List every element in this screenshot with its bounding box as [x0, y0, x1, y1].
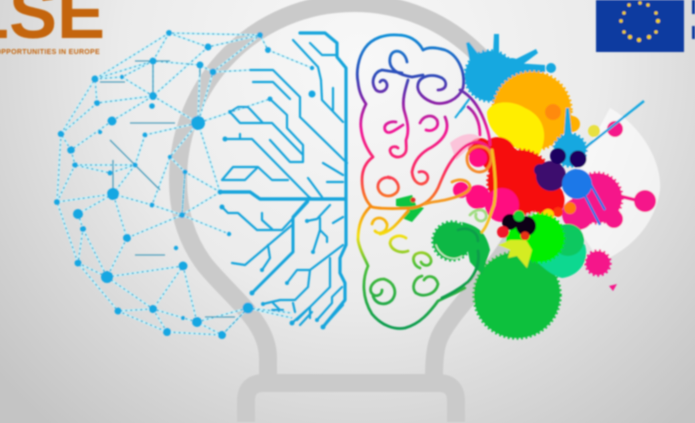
green leaf	[396, 195, 424, 222]
paint splashes	[396, 34, 656, 338]
yellow green splat	[498, 240, 532, 268]
teal splash	[537, 243, 588, 279]
mesh nodes	[54, 30, 316, 339]
cyan splash	[455, 34, 556, 118]
green blob left	[433, 222, 471, 260]
yellow splash	[487, 102, 544, 158]
yellow dot	[588, 125, 600, 137]
upper swirls	[390, 51, 423, 77]
lower circuit traces	[222, 202, 308, 270]
upper circuit traces	[230, 40, 347, 163]
colourful right brain swirls	[357, 35, 495, 328]
yellow spiral	[372, 211, 408, 234]
EU flag	[596, 0, 684, 52]
orange loops	[467, 146, 491, 172]
blue splash	[562, 169, 605, 225]
mesh links	[57, 33, 312, 335]
green spirals	[390, 236, 408, 252]
orange splash	[493, 72, 571, 150]
light bulb outline	[178, 3, 530, 422]
pink splash left	[450, 134, 519, 222]
white splash halo	[560, 108, 660, 262]
logo	[0, 0, 105, 56]
bright green splash	[506, 214, 564, 262]
brain outline	[357, 35, 492, 209]
black splash	[497, 210, 536, 240]
magenta branches	[460, 90, 490, 145]
magenta splash right	[562, 121, 656, 291]
circuit spine	[300, 33, 346, 327]
middle circuit traces	[222, 134, 343, 198]
green connector	[462, 222, 490, 275]
yellow band	[542, 209, 554, 221]
orange bits	[553, 202, 576, 217]
orange spot	[545, 104, 561, 120]
circuit end nodes	[218, 110, 326, 330]
mesh globe	[54, 30, 316, 339]
big green swirl	[442, 251, 479, 298]
partner logo fragment	[692, 0, 695, 39]
big green splash	[474, 252, 560, 338]
circuit left brain	[218, 33, 347, 330]
red splash	[468, 137, 565, 217]
cyan splash centre	[554, 101, 644, 166]
purple splash	[534, 148, 586, 191]
